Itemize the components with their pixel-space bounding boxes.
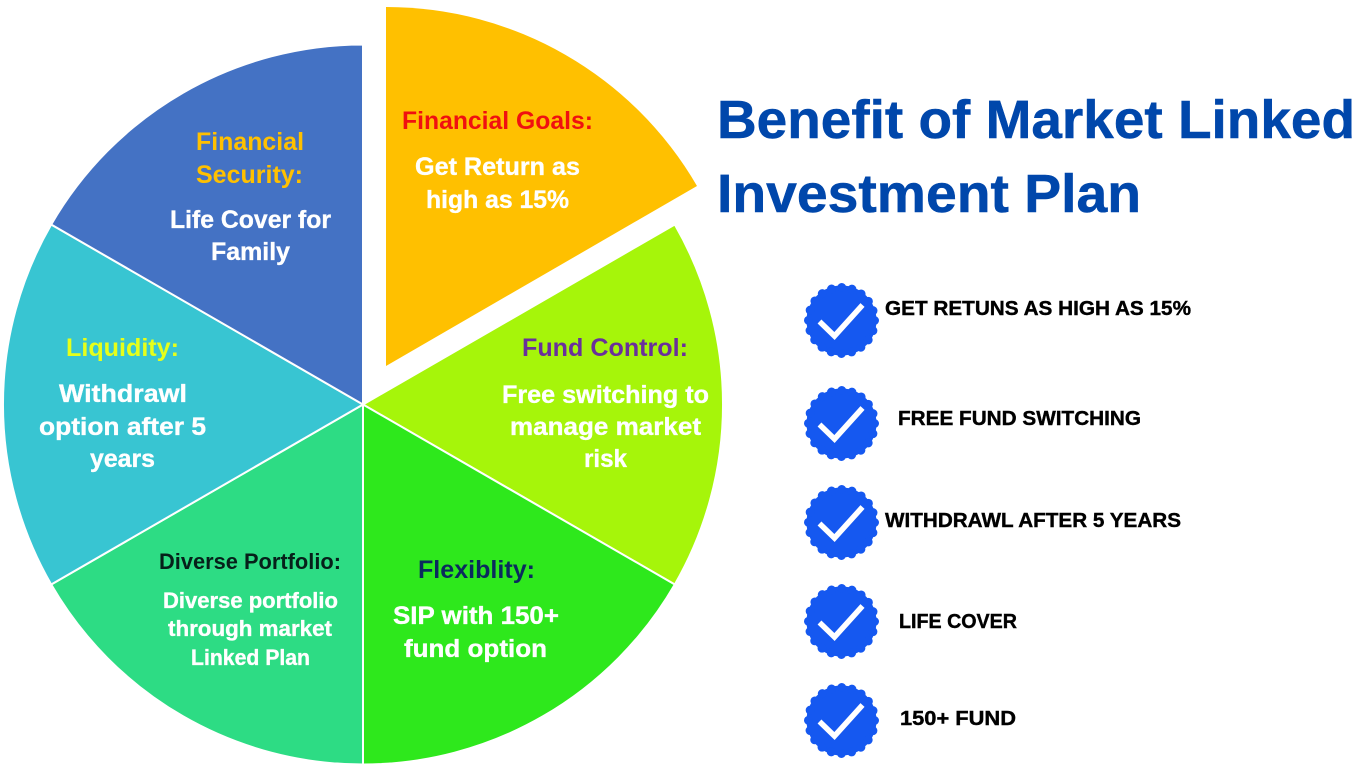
slice: Fund Control: risk [584,445,627,473]
slice: Financial Security: Financial [196,128,304,156]
slice: Liquidity: Withdrawl [59,380,187,408]
slice: Financial Security: Life Cover for [170,206,331,234]
slice: Financial Security: Family [211,238,290,266]
item: fund switching: FREE FUND SWITCHING [898,408,1141,430]
slice: Diverse Portfolio: Diverse portfolio [163,588,338,613]
item: fund switching [806,388,1141,458]
item: 150+ fund [806,686,1016,756]
slice: Financial Goals: Get Return as [415,153,580,181]
item: 150+ fund: 150+ FUND [900,708,1016,730]
slice: Liquidity [3,224,363,584]
title: Benefit of Market Linked [717,90,1355,150]
slice: Liquidity: Liquidity: [66,334,179,362]
slice: Diverse Portfolio: through market [168,616,333,641]
slice: Diverse Portfolio [51,404,363,764]
item: withdrawal: WITHDRAWL AFTER 5 YEARS [885,510,1181,532]
item: withdrawal [806,488,1181,558]
slice: Financial Security: Security: [196,161,303,189]
slice: Flexibility [363,404,675,764]
pie chart [3,7,723,764]
slice: Financial Goals [386,7,697,366]
slice: Fund Control: Fund Control: [522,334,688,362]
slice: Diverse Portfolio: Linked Plan [191,645,310,670]
slice: Financial Security [51,44,363,404]
benefits checklist [806,286,1191,756]
slice: Fund Control: Free switching to [502,381,709,409]
item: returns: GET RETUNS AS HIGH AS 15% [885,298,1191,320]
slice: Diverse Portfolio: Diverse Portfolio: [159,549,341,574]
slice: Flexibility: SIP with 150+ [393,602,559,630]
title: Investment Plan [717,164,1141,224]
slice: Fund Control [363,224,723,584]
slice: Flexibility: Flexiblity: [418,556,535,584]
item: life cover: LIFE COVER [899,611,1018,633]
slice: Fund Control: manage market [510,413,702,441]
slice: Financial Goals: Financial Goals: [402,107,593,135]
slice: Flexibility: fund option [404,635,547,663]
title [717,90,1355,224]
item: life cover [806,586,1018,656]
item: returns [806,286,1191,356]
slice: Liquidity: option after 5 [39,413,206,441]
slice: Financial Goals: high as 15% [426,186,569,214]
slice: Liquidity: years [90,445,155,473]
